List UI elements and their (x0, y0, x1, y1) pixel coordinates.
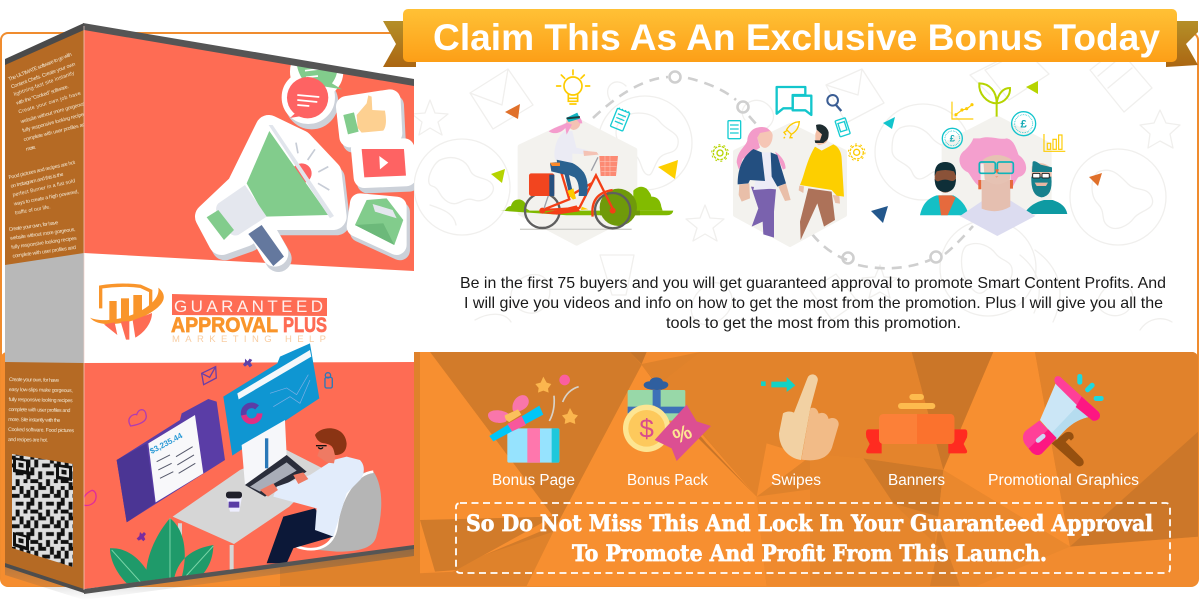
coin icons (942, 112, 1036, 148)
saddle (550, 163, 560, 166)
illustration: three portraits: £ (950, 134, 956, 144)
side text block 1: Content Chefs. Create your own (10, 61, 76, 90)
icon: banners ribbon (866, 394, 967, 453)
box edge highlights (83, 26, 85, 590)
icon: swipes hand (761, 374, 839, 460)
box left side (0, 23, 100, 593)
icon: bonus pack gift and coin (623, 377, 711, 461)
blue dashboard panel (223, 343, 319, 456)
icon: promotional megaphone (1023, 374, 1104, 466)
megaphone cone (247, 131, 328, 217)
man right (1024, 161, 1067, 214)
side text block 1: website without more gorgeous, (20, 101, 87, 125)
search icon (827, 95, 841, 111)
chair (317, 472, 382, 552)
box ground shadow (5, 548, 414, 600)
illustration: three portraits: £ (1020, 119, 1027, 131)
woman (737, 127, 791, 238)
green speech bubble (297, 66, 342, 90)
body paragraph: I will give you videos and info on how to get the most from the promotion. Plus I will give you all the (464, 295, 1163, 312)
box bottom dark edge (84, 545, 414, 594)
side text block 2: traffic of our life. (15, 204, 51, 216)
side text block 1: more. (25, 145, 37, 153)
sticker shadow (212, 86, 409, 259)
bushes and ground (500, 199, 673, 215)
title: Claim This As An Exclusive Bonus Today (433, 17, 1160, 58)
icon: bonus pack gift and coin: $ (639, 413, 654, 443)
megaphone sticker illustration (207, 55, 409, 266)
side text block 4: fully responsive looking recipes (9, 397, 73, 404)
box front white band (84, 252, 414, 364)
thumbs up icon (357, 95, 386, 133)
callout: dashed call to action: So Do Not Miss This And Lock In Your Guaranteed Approval (466, 511, 1153, 537)
office illustration (83, 343, 381, 583)
side text block 1: complete with user profiles and (23, 121, 89, 143)
side text block 1: Create your own job have (18, 91, 82, 115)
panel: orange polygon lower background (1, 352, 1200, 586)
side text block 4: easy low-slips make gorgeous, (9, 387, 73, 394)
line chart icon (952, 102, 973, 119)
illustration: three portraits (920, 83, 1067, 236)
logo: guaranteed approval plus (90, 285, 327, 345)
ribbon tail left (383, 21, 416, 67)
side text block 4: and recipes are hot. (8, 437, 48, 444)
woman centre (959, 137, 1035, 236)
heading ribbon (383, 9, 1198, 67)
hexagon backdrop (735, 125, 845, 245)
icon: bonus pack gift and coin: % (669, 420, 696, 449)
man left (920, 162, 969, 215)
label: bonus page: Bonus Page (492, 472, 575, 489)
hexagon backdrop (520, 120, 635, 243)
side text block 1: with the "Cooked" software. (15, 84, 70, 107)
side text block 2: perfect Burner in a flat sold (12, 178, 76, 198)
callout: dashed call to action: To Promote And Profit From This Launch. (572, 541, 1047, 567)
red speech bubble (287, 77, 328, 118)
body paragraph: tools to get the most from this promotion. (666, 315, 961, 332)
side text block 4: Create your own, for have (9, 377, 59, 384)
person (267, 508, 333, 563)
logo band (172, 294, 327, 316)
product box (0, 23, 414, 600)
plant (110, 518, 213, 583)
side text block 2: ways to create a high powered, (13, 189, 79, 207)
megaphone red part (294, 163, 312, 182)
desk (173, 450, 326, 544)
label: banners: Banners (888, 472, 945, 489)
logo tagline: MARKETING HELP (172, 334, 326, 345)
man (799, 124, 844, 240)
coffee cup (227, 497, 242, 512)
body paragraph: Be in the first 75 buyers and you will get guaranteed approval to promote Smart Content Profits. And (460, 275, 1166, 292)
side text block 4 (8, 377, 75, 444)
side text block 3: Create your own, for have (8, 220, 59, 233)
light bulb icon (557, 70, 590, 104)
body paragraph (460, 275, 1166, 332)
gear icon green (712, 145, 728, 161)
side text block 2: Food pictures and recipes are hot (8, 160, 76, 181)
chat bubbles icon (777, 87, 811, 115)
doodle pattern: globes, envelopes and stars (412, 48, 1180, 330)
side text block 1: lightning-fast site instantly (13, 70, 76, 98)
tablet icon (835, 118, 850, 137)
label: bonus pack: Bonus Pack (627, 472, 708, 489)
envelope icon (355, 198, 403, 245)
logo word guaranteed: GUARANTEED (174, 297, 323, 316)
logo word approval: APPROVAL (171, 314, 278, 337)
video card icon (362, 149, 406, 177)
side text block 4: complete with user profiles and (8, 407, 71, 414)
side text block 3: complete with user profiles and (12, 245, 77, 260)
callout: dashed call to action (456, 503, 1170, 573)
floating outlines (83, 367, 332, 506)
QR code (12, 454, 73, 567)
bar chart icon (1044, 134, 1065, 151)
notepad icon (728, 121, 741, 139)
side text block 3 (8, 218, 79, 260)
side text block 1 (0, 52, 100, 154)
decorative triangles (491, 81, 1102, 223)
label: promotional graphics: Promotional Graphics (988, 472, 1139, 489)
illustration: couple walking (712, 87, 865, 245)
dashed connector path with nodes (593, 72, 973, 268)
box front bottom red panel (84, 362, 414, 589)
side text block 2 (6, 160, 85, 218)
logo emblem (90, 285, 164, 340)
laptop (242, 420, 287, 485)
rider (550, 162, 573, 195)
side text block 3: fully responsive looking recipes (11, 236, 78, 251)
small crosses (243, 359, 252, 367)
notepad icon (610, 107, 630, 131)
box top dark edge (83, 23, 414, 86)
label: swipes: Swipes (771, 472, 821, 489)
box front top red panel (84, 26, 414, 271)
hexagon backdrop (942, 115, 1052, 235)
side text block 3: website without more gorgeous, (10, 227, 76, 242)
side text block 4: more. Site instantly with the (8, 417, 60, 424)
illustration: woman on bicycle (500, 70, 673, 243)
side text block 1: fully responsive looking recipes (22, 111, 87, 134)
logo word plus: PLUS (283, 314, 327, 337)
plant icon (979, 83, 1010, 117)
ribbon tail right (1166, 21, 1198, 67)
bicycle (525, 157, 630, 228)
icon: bonus page gift (488, 375, 579, 463)
ribbon bar (403, 9, 1177, 62)
side text block 4: Cooked software. Food pictures (8, 427, 75, 434)
sticker white base (208, 55, 406, 253)
pannier (529, 173, 554, 196)
gear icon yellow (848, 144, 865, 161)
side text block 2: on Instagram and this is the (10, 172, 64, 190)
rocket icon (784, 122, 799, 138)
office illustration: $3,235.44 (148, 431, 184, 456)
side text block 1: The ULTIMATE software to go with (8, 52, 73, 83)
purple folder (117, 399, 225, 522)
basket (599, 156, 618, 176)
